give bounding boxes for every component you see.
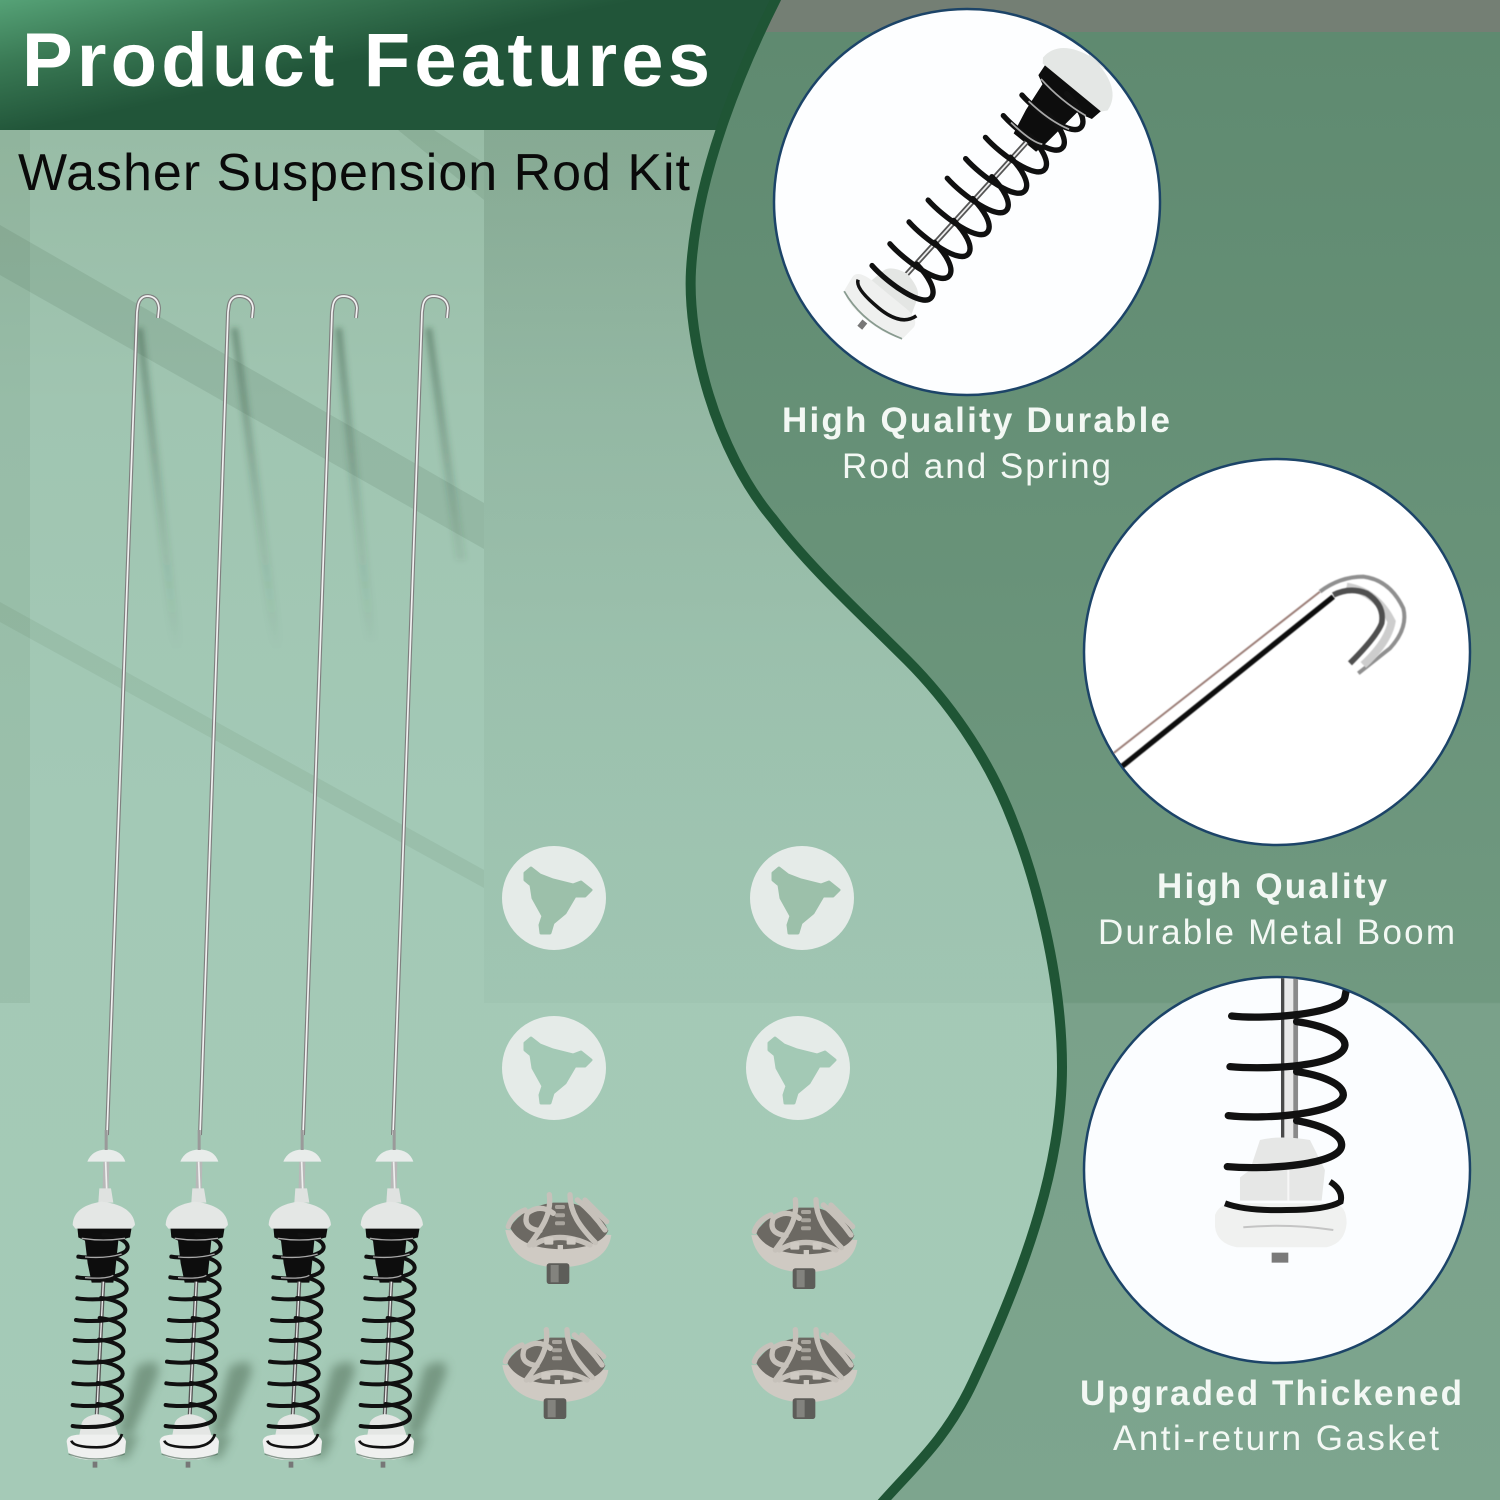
callout circle: rod and spring	[774, 9, 1160, 395]
callout circle: gasket	[1084, 975, 1470, 1363]
knob top right	[751, 1200, 857, 1289]
rod assembly 3	[263, 296, 376, 1468]
rod assembly 2	[160, 296, 282, 1468]
rod assembly 1	[67, 296, 182, 1468]
title banner: Product Features	[22, 18, 710, 103]
washer top right	[750, 846, 854, 950]
rod assembly 4	[355, 296, 466, 1468]
title banner	[0, 0, 800, 130]
panel: right curved background	[640, 0, 1500, 1500]
caption: metal boom	[1098, 867, 1455, 952]
callout circle: metal hook	[1084, 459, 1470, 845]
caption: gasket	[1080, 1374, 1462, 1458]
caption: rod and spring	[782, 401, 1170, 486]
caption: gasket: Upgraded Thickened	[1080, 1374, 1462, 1413]
knob top left	[505, 1195, 611, 1284]
washer top left	[502, 846, 606, 950]
caption: gasket: Anti-return Gasket	[1113, 1419, 1439, 1458]
knob lower left	[502, 1330, 608, 1419]
caption: metal boom: High Quality	[1157, 867, 1388, 906]
washer lower left	[502, 1016, 606, 1120]
caption: rod and spring: Rod and Spring	[842, 447, 1111, 486]
caption: rod and spring: High Quality Durable	[782, 401, 1170, 440]
subtitle: Washer Suspension Rod Kit	[18, 144, 691, 202]
caption: metal boom: Durable Metal Boom	[1098, 913, 1455, 952]
washer lower right	[746, 1016, 850, 1120]
knob lower right	[751, 1330, 857, 1419]
